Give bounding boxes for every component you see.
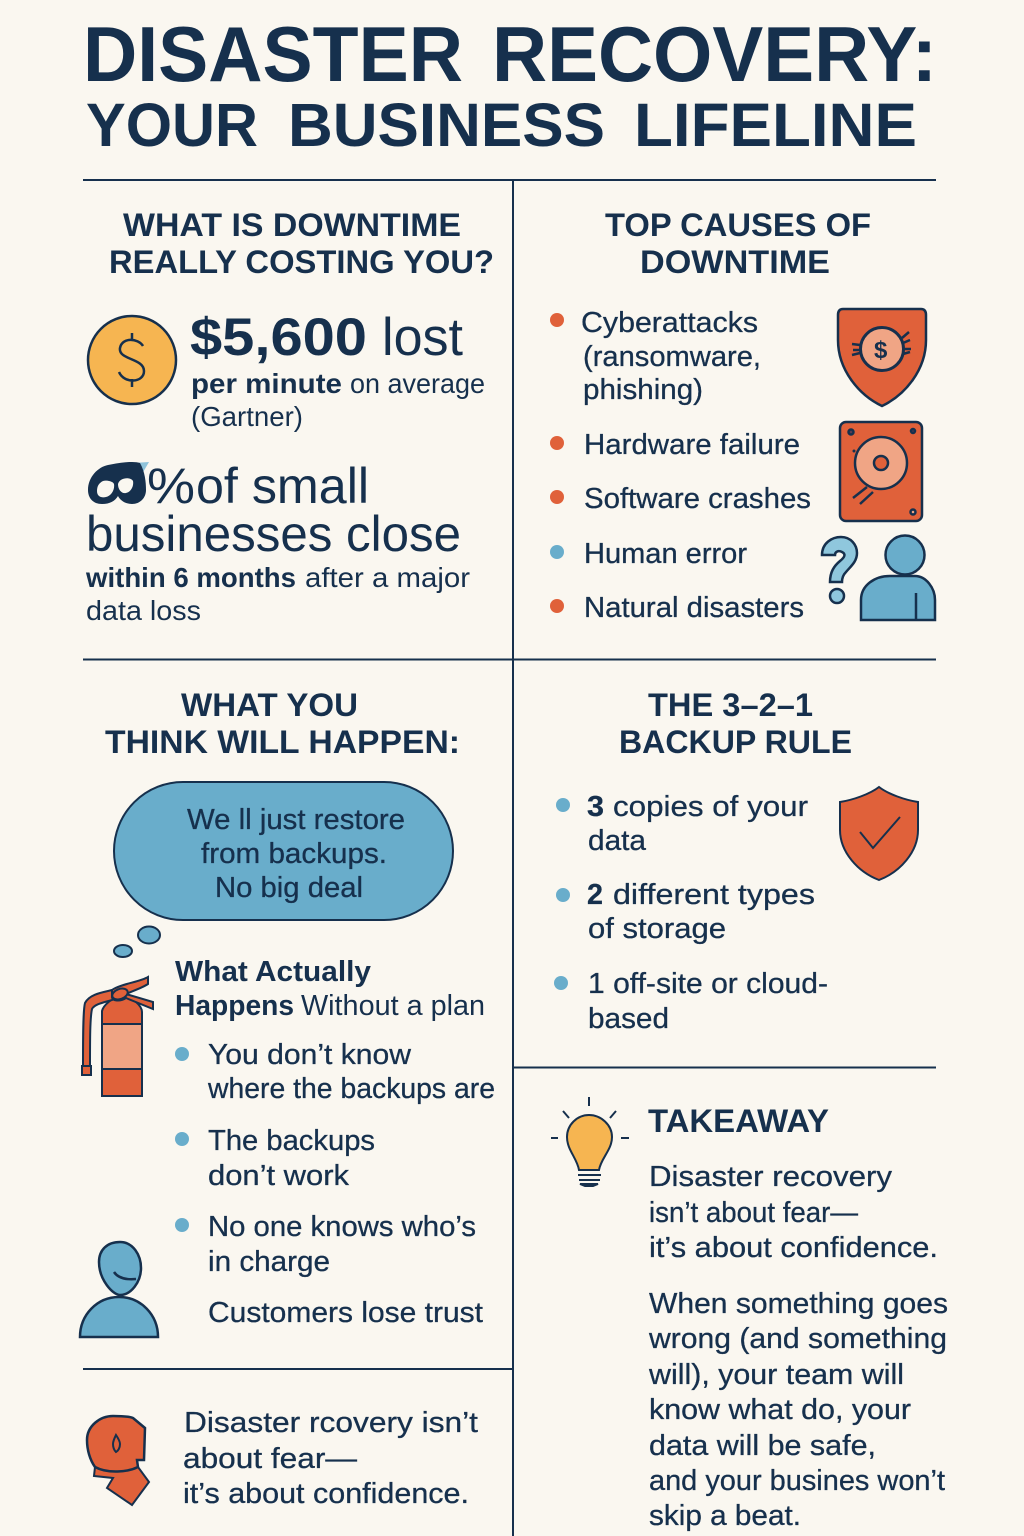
causes list: phishing): [583, 374, 703, 406]
stat: 5600 lost: per minute: [191, 368, 342, 399]
list: what actually happens: in charge: [208, 1246, 330, 1278]
heading: backup rule: THE 3–2–1: [648, 687, 813, 723]
panel: 3-2-1 backup rule: [554, 687, 918, 1035]
title: RECOVERY:: [492, 10, 937, 98]
text: confidence note: [183, 1407, 478, 1510]
icon: dollar coin: [88, 316, 176, 404]
list: what actually happens: don’t work: [208, 1160, 350, 1192]
icon: check shield: [840, 787, 918, 880]
panel: what you think will happen: [80, 687, 495, 1337]
stat: small businesses close: within 6 months: [85, 562, 296, 593]
list: what actually happens: where the backups are: [207, 1073, 495, 1105]
title: LIFELINE: [634, 91, 917, 159]
icon: orange head: [87, 1416, 149, 1505]
subheading: what actually happens: Without a plan: [301, 990, 485, 1022]
list: backup rule: 1 off-site or cloud-: [588, 968, 828, 1000]
stat: 5600 lost: [190, 308, 485, 432]
stat figure: blotted 80: [88, 462, 149, 504]
heading: top causes: DOWNTIME: [640, 244, 830, 280]
text: takeaway body: [648, 1161, 948, 1532]
subheading: what actually happens: What Actually: [175, 956, 371, 988]
list: what actually happens: You don’t know: [208, 1039, 412, 1071]
icon: light bulb: [551, 1097, 629, 1186]
stat: 5600 lost: (Gartner): [191, 401, 303, 432]
list: backup rule: data: [588, 825, 647, 857]
text: takeaway body: it’s about confidence.: [649, 1232, 938, 1264]
text: takeaway body: isn’t about fear—: [649, 1197, 858, 1229]
text: takeaway body: data will be safe,: [649, 1430, 876, 1462]
icon: person: [80, 1242, 158, 1337]
causes list: (ransomware,: [583, 341, 761, 373]
thought bubble: We ll just restore: [187, 804, 405, 836]
list: backup rule: 3: [587, 791, 604, 823]
text: takeaway body: Disaster recovery: [649, 1161, 893, 1193]
title: YOUR: [86, 91, 258, 159]
causes list: Hardware failure: [584, 429, 800, 461]
stat: small businesses close: data loss: [86, 595, 201, 626]
causes list: [550, 307, 811, 624]
list: backup rule: different types: [613, 879, 815, 911]
icon: hard drive: [840, 422, 922, 521]
panel: downtime cost: [85, 207, 494, 626]
stat: small businesses close: of small: [196, 458, 369, 514]
stat: small businesses close: [85, 458, 470, 626]
heading: takeaway: TAKEAWAY: [648, 1103, 829, 1139]
causes list: Human error: [584, 538, 747, 570]
text: takeaway body: know what do, your: [649, 1394, 911, 1426]
title: DISASTER: [83, 10, 463, 98]
panel: confidence note: [87, 1407, 478, 1510]
subheading: what actually happens: Happens: [175, 990, 294, 1022]
panel: takeaway: [551, 1097, 948, 1532]
heading: top causes: TOP CAUSES OF: [605, 207, 871, 243]
text: takeaway body: skip a beat.: [649, 1500, 801, 1532]
icon: confused person: [822, 536, 935, 620]
icon: fire extinguisher: [82, 977, 153, 1096]
list: backup rule: [554, 791, 828, 1035]
panel: top causes: [550, 207, 935, 624]
thought bubble: No big deal: [215, 872, 363, 904]
text: confidence note: about fear—: [183, 1443, 357, 1475]
icon: cyber shield: [838, 309, 926, 406]
subheading: what actually happens: [175, 956, 485, 1022]
stat: small businesses close: businesses close: [86, 506, 461, 562]
icon: cyber shield: $: [874, 337, 888, 364]
list: backup rule: 2: [587, 879, 603, 911]
stat: 5600 lost: $5,600: [190, 308, 367, 367]
list: what actually happens: Customers lose trust: [208, 1297, 483, 1329]
heading: top causes: [605, 207, 871, 280]
list: backup rule: of storage: [588, 913, 726, 945]
causes list: Natural disasters: [584, 592, 804, 624]
heading: downtime cost: [109, 207, 494, 280]
heading: backup rule: [619, 687, 852, 760]
text: confidence note: Disaster rcovery isn’t: [184, 1407, 478, 1439]
causes list: Software crashes: [584, 483, 811, 515]
heading: expectation: WHAT YOU: [181, 687, 358, 723]
thought bubble: [114, 782, 453, 957]
list: what actually happens: [175, 1039, 495, 1329]
text: takeaway body: and your busines won’t: [649, 1465, 945, 1497]
text: confidence note: it’s about confidence.: [183, 1478, 469, 1510]
text: takeaway body: When something goes: [649, 1288, 948, 1320]
heading: expectation: THINK WILL HAPPEN:: [105, 724, 460, 760]
heading: downtime cost: REALLY COSTING YOU?: [109, 244, 494, 280]
heading: backup rule: BACKUP RULE: [619, 724, 852, 760]
title: BUSINESS: [288, 91, 605, 159]
title: [83, 10, 937, 159]
heading: expectation: [105, 687, 460, 760]
causes list: Cyberattacks: [581, 307, 758, 339]
list: what actually happens: No one knows who’s: [208, 1211, 476, 1243]
stat: 5600 lost: lost: [382, 308, 463, 367]
heading: downtime cost: WHAT IS DOWNTIME: [123, 207, 461, 243]
list: backup rule: based: [588, 1003, 669, 1035]
stat: small businesses close: %: [147, 458, 195, 514]
text: takeaway body: wrong (and something: [648, 1323, 947, 1355]
list: what actually happens: The backups: [208, 1125, 375, 1157]
stat: 5600 lost: on average: [350, 368, 485, 399]
thought bubble: from backups.: [201, 838, 387, 870]
text: takeaway body: will), your team will: [648, 1359, 904, 1391]
list: backup rule: copies of your: [613, 791, 808, 823]
stat: small businesses close: after a major: [305, 562, 470, 593]
